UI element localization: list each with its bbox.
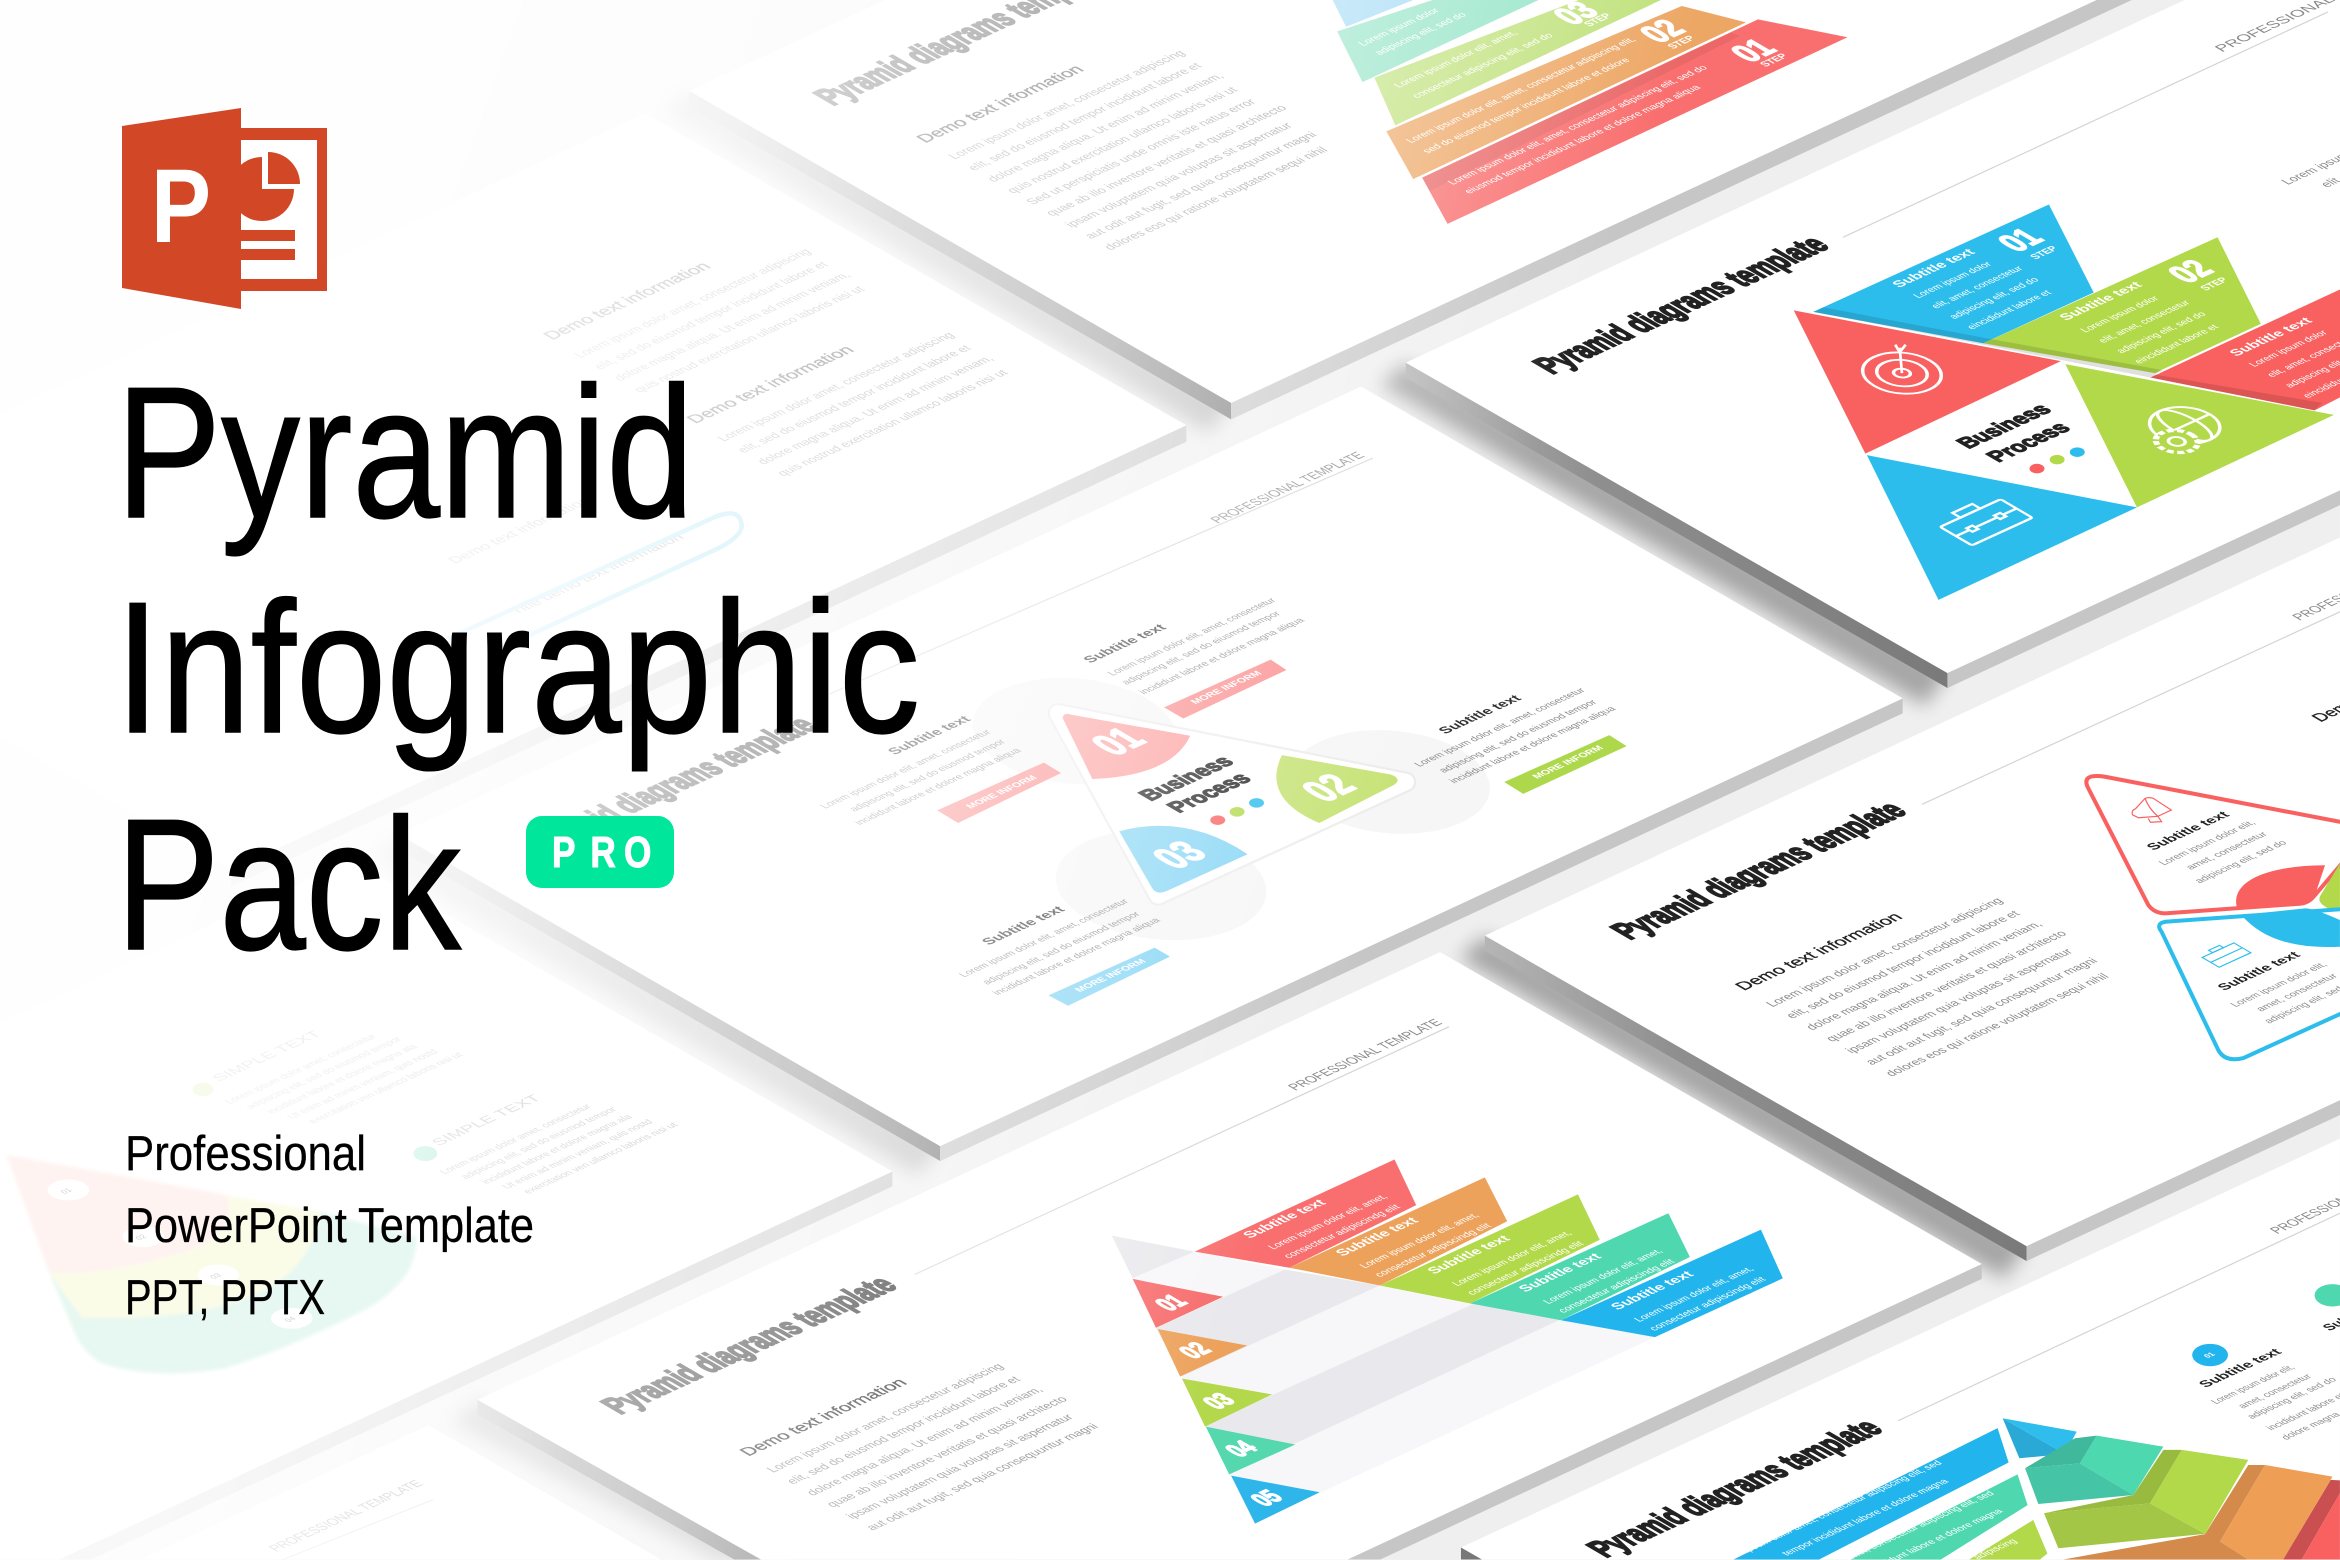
- rounded triangle: 01: [1080, 721, 1156, 762]
- simple text block two: Ut enim ad minim veniam, quis nostd: [500, 1118, 656, 1191]
- colored ribbons: Lorem ipsum dolor elit, amet,: [1266, 1193, 1391, 1251]
- frame: blue: amet, consectetur: [2254, 972, 2340, 1013]
- icon: small briefcase: [2198, 941, 2251, 967]
- heading: Pyramid diagrams template: [1525, 232, 1838, 379]
- numbered text block: 01: [2202, 1351, 2218, 1359]
- frame: red: amet, consectetur: [2184, 830, 2271, 872]
- heading: Pyramid diagrams template: [1603, 797, 1915, 944]
- frame: blue: Lorem ipsum dolor elit,: [2228, 961, 2330, 1009]
- triangle tabs and triangles: 02: [2159, 255, 2222, 288]
- triangle tabs and triangles: eincididunt labore et: [2132, 323, 2222, 366]
- block: subtitle left: Lorem ipsum dolor elit, amet, consectetur: [818, 728, 995, 810]
- stepped pyramid bands: adipiscing elit, sed do: [1373, 11, 1470, 57]
- subtitle text block: [125, 1127, 534, 1325]
- slide: faded top-left text slide: Demo text information: [682, 343, 858, 426]
- simple text block one: Ut enim ad minim veniam, quis nostd: [285, 1048, 441, 1121]
- icon: briefcase: [1932, 495, 2032, 545]
- demo text block: [1731, 894, 2130, 1078]
- demo text block: dolores eos qui ratione voluptatem sequi nihil: [1101, 145, 1331, 252]
- rounded triangle: 02: [1291, 768, 1367, 808]
- professional template label: PROFESSIONAL TEMPLATE: [1206, 449, 1368, 525]
- simple text block one: exercitation ven ullamco laboris nisi ut: [306, 1051, 466, 1126]
- block: subtitle right: adipiscing elit, sed do eiusmod tempor: [1437, 698, 1601, 775]
- simple text block two: SIMPLE TEXT: [427, 1092, 545, 1148]
- colored ribbons: consectetur adipiscindg elit: [1647, 1276, 1769, 1333]
- slide: faded top-left text slide: Title demo text information: [505, 531, 687, 616]
- block: subtitle right: incididunt labore et dolore magna aliqua: [1447, 705, 1619, 785]
- striped triangle: [1112, 1236, 1655, 1523]
- demo text block: dolore magna aliqua. Ut enim ad minim veniam,: [1802, 919, 2045, 1032]
- triangle tabs and triangles: adipiscing elit, sed do: [2114, 310, 2210, 355]
- block: subtitle right: Lorem ipsum dolor elit, amet, consectetur: [1412, 686, 1589, 769]
- triangle tabs and triangles: Lorem ipsum dolor: [2247, 329, 2331, 369]
- subtitle text block: PPT, PPTX: [125, 1271, 325, 1325]
- triangle tabs and triangles: [1794, 204, 2340, 600]
- step bars: ipsum dolor amet, consectetur adipiscing elit, sed: [1741, 1459, 1945, 1554]
- heading: Pyramid diagrams template: [1579, 1415, 1891, 1560]
- block: subtitle bottom: MORE INFORM: [1073, 958, 1149, 994]
- subtitle text block: Professional: [125, 1127, 366, 1181]
- block: subtitle left: MORE INFORM: [964, 774, 1040, 810]
- rounded triangle: 03: [1141, 835, 1218, 875]
- demo text block: Demo text information: [735, 1376, 911, 1459]
- faded pyramid blob: 04: [282, 1315, 299, 1323]
- demo text block: elit, sed do eiusmod tempor incididunt labore et: [1783, 908, 2024, 1020]
- colored ribbons: Subtitle text: [1239, 1197, 1330, 1240]
- simple text block two: exercitation ven ullamco laboris nisi ut: [521, 1121, 681, 1196]
- triangle tabs and triangles: eincididunt labore et: [1965, 289, 2055, 331]
- slide: faded top-left text slide: Lorem ipsum dolor amet, consectetur adipiscing: [714, 330, 958, 443]
- frame: red: [2086, 776, 2340, 917]
- badge: PRO: PRO: [552, 828, 651, 877]
- frame: red: Lorem ipsum dolor elit,: [2157, 819, 2259, 867]
- demo text block: quis nostrud exercitation ullamco laboris nisi ut: [1003, 85, 1241, 195]
- colored ribbons: [1195, 1160, 1783, 1337]
- stepped pyramid bands: sed do eiusmod tempor incididunt labore et dolore: [1420, 56, 1634, 155]
- demo text block: aut odit aut fugit, sed quia consequuntur magni: [1862, 956, 2101, 1067]
- demo text block: Lorem ipsum dolor amet, consectetur adipiscing: [763, 1361, 1007, 1474]
- demo text block: aut odit aut fugit, sed quia consequuntur magni: [863, 1421, 1101, 1532]
- faded pyramid blob: 02: [133, 1233, 149, 1241]
- stepped pyramid bands: eiusmod tempor incididunt labore et dolore magna aliqua: [1462, 84, 1704, 196]
- background circle three: [1012, 807, 1310, 962]
- slide: faded top-left text slide: dolore magna aliqua. Ut enim ad minim veniam,: [611, 270, 854, 383]
- heading: Pyramid diagrams template: [593, 1272, 906, 1419]
- block: subtitle right: MORE INFORM: [1530, 744, 1607, 781]
- demo text block: dolore magna aliqua. Ut enim ad minim veniam,: [984, 71, 1227, 184]
- block: subtitle right: Subtitle text: [1435, 693, 1525, 736]
- numbered tabs: 02: [1172, 1338, 1218, 1362]
- triangle tabs and triangles: Subtitle text: [2226, 315, 2316, 358]
- background circle one: [931, 656, 1218, 806]
- block: subtitle left: adipiscing elit, sed do eiusmod tempor: [847, 738, 1009, 813]
- icon: globe gear: [2125, 400, 2236, 457]
- demo text block: Lorem ipsum dolor amet, consectetur adipiscing: [1763, 896, 2006, 1009]
- demo text block: [912, 46, 1349, 252]
- colored ribbons: Subtitle text: [1515, 1251, 1605, 1294]
- slide: faded top-left text slide: Lorem ipsum dolor amet, consectetur adipiscing: [571, 247, 815, 360]
- demo text block: ipsam voluptatem quia voluptas sit aspernatur: [1062, 121, 1296, 229]
- slide: center rounded triangle: [373, 387, 1903, 1174]
- 3D pyramid: [2003, 1418, 2340, 1559]
- triangle tabs and triangles: STEP: [2028, 245, 2061, 261]
- stepped pyramid bands: STEP: [1665, 34, 1698, 51]
- numbered tabs: 05: [1244, 1486, 1289, 1510]
- subtitle text block: PowerPoint Template: [125, 1199, 534, 1253]
- center label: business process: [1951, 400, 2085, 473]
- simple text block one: Lorem ipsum dolor amet, consectetur: [223, 1033, 380, 1106]
- simple text block two: adipiscing elit, sed do eiusmod tempor: [458, 1106, 620, 1181]
- triangle tabs and triangles: 01: [1989, 223, 2052, 257]
- badge: PRO: [526, 816, 674, 888]
- icon: target: [1846, 344, 1958, 402]
- rounded triangle: Process: [1161, 769, 1257, 816]
- slide: faded top-left text slide: Demo text information: [444, 495, 595, 566]
- stepped pyramid bands: Lorem ipsum dolor elit, amet,: [1392, 29, 1521, 90]
- stepped pyramid bands: STEP: [1581, 12, 1615, 28]
- stepped pyramid bands: consectetur adipiscing elit, sed do: [1410, 32, 1557, 100]
- demo text block: quae ab illo inventore veritatis et quasi architecto: [1822, 928, 2070, 1044]
- stepped pyramid bands: Lorem ipsum dolor: [1356, 7, 1443, 48]
- title: Pyramid: [116, 348, 694, 557]
- numbered tabs: [1133, 1279, 1320, 1524]
- icon: megaphone: [2132, 798, 2171, 822]
- block: subtitle top: Lorem ipsum dolor elit, amet, consectetur: [1105, 597, 1280, 678]
- title: Infographic: [115, 563, 920, 772]
- faded pyramid blob: 03: [208, 1272, 224, 1280]
- block: subtitle top: Subtitle text: [1079, 622, 1170, 665]
- numbered text block: Lorem ipsum dolor elit,: [2209, 1364, 2298, 1406]
- frame: red: adipiscing elit, sed do: [2193, 839, 2290, 885]
- triangle tabs and triangles: STEP: [2198, 276, 2231, 293]
- frame: red: Subtitle text: [2143, 809, 2233, 852]
- triangle tabs and triangles: elit, amet, consectetur: [1929, 265, 2027, 310]
- colored ribbons: Lorem ipsum dolor elit, amet,: [1450, 1230, 1575, 1288]
- block: subtitle bottom: incididunt labore et dolore magna aliqua: [991, 916, 1164, 997]
- triangle tabs and triangles: adipiscing elit, sed do: [1947, 276, 2042, 321]
- slide: bottom five tier pyramid: [452, 952, 1982, 1559]
- demo text block: aut odit aut fugit, sed quia consequuntur magni: [1081, 130, 1320, 241]
- simple text block two: Lorem ipsum dolor amet, consectetur: [438, 1103, 595, 1176]
- title: Pack: [116, 780, 461, 989]
- simple text block one: incididunt labore et dolore magna ala: [264, 1043, 421, 1116]
- block: subtitle bottom: Subtitle text: [978, 904, 1069, 947]
- numbered text block: Subtitle text: [2195, 1346, 2286, 1389]
- demo text block: elit, sed do eiusmod tempor incididunt labore et: [964, 61, 1205, 173]
- icon: PowerPoint logo: [122, 108, 327, 309]
- slide: top-right triangles: [1380, 0, 2340, 706]
- block: subtitle left: Subtitle text: [884, 714, 975, 757]
- center label: business process: Process: [1980, 419, 2076, 465]
- slide: faded top-left text slide: dolore magna aliqua. Ut enim ad minim veniam,: [754, 354, 997, 466]
- rounded triangle: Business: [1133, 752, 1239, 804]
- stepped pyramid bands: Lorem ipsum dolor elit, amet, consectetur adipiscing elit, sed do: [1446, 64, 1711, 187]
- demo text block: dolore magna aliqua. Ut enim ad minim veniam,: [803, 1385, 1046, 1498]
- step bars: [1734, 1428, 2047, 1560]
- icon: arrow: [1895, 345, 1906, 373]
- icon: PowerPoint logo: P: [151, 148, 211, 265]
- triangle tabs and triangles: Lorem ipsum dolor: [2078, 295, 2163, 334]
- stepped pyramid bands: 01: [1722, 34, 1785, 67]
- triangle tabs and triangles: Lorem ipsum dolor: [1911, 260, 1995, 300]
- colored ribbons: consectetur adipiscindg elit: [1465, 1240, 1587, 1297]
- block: subtitle right: [1412, 686, 1627, 794]
- block: subtitle top: adipiscing elit, sed do eiusmod tempor: [1119, 610, 1284, 687]
- block: subtitle left: [818, 714, 1061, 827]
- step bars: tempor incididunt labore et dolore magna: [1780, 1478, 1952, 1558]
- rounded triangle: [1058, 713, 1406, 895]
- slide: faded bottom-left: [140, 1425, 661, 1559]
- demo text block: Lorem ipsum dolor amet, consectetur adipiscing: [945, 48, 1189, 161]
- triangle tabs and triangles: elit, amet, consectetur: [2096, 299, 2194, 345]
- block: subtitle bottom: adipiscing elit, sed do eiusmod tempor: [980, 910, 1144, 986]
- colored ribbons: Lorem ipsum dolor elit, amet,: [1541, 1248, 1666, 1306]
- demo text block: Sed ut perspiciatis unde omnis iste natus error: [1023, 97, 1259, 207]
- slide: faded simple text slide: [0, 860, 892, 1559]
- demo text block: elit, sed do eiusmod tempor incididunt labore et: [783, 1374, 1024, 1486]
- simple text block one: adipiscing elit, sed do eiusmod tempor: [244, 1035, 405, 1111]
- block: subtitle top: MORE INFORM: [1188, 670, 1265, 706]
- simple text block one: [193, 1019, 466, 1138]
- background circle two: [1251, 709, 1531, 855]
- numbered text block: amet, consectetur: [2236, 1373, 2316, 1410]
- block: subtitle top: [1079, 597, 1308, 719]
- faded pyramid blob: [7, 1155, 416, 1373]
- slide: faded top-left text slide: elit, sed do eiusmod tempor incididunt labore et: [734, 343, 975, 455]
- title: [115, 348, 920, 989]
- simple text block two: [413, 1089, 681, 1208]
- slide: faded top-left text slide: elit, sed do eiusmod tempor incididunt labore et: [591, 259, 832, 371]
- slide: right demo text with frames: [1459, 491, 2340, 1279]
- slide: bottom-right 3D pyramid: [1461, 1139, 2340, 1560]
- stepped pyramid bands: 02: [1631, 14, 1694, 48]
- colored ribbons: Subtitle text: [1423, 1233, 1514, 1276]
- colored ribbons: Subtitle text: [1607, 1269, 1697, 1312]
- demo text block: dolores eos qui ratione voluptatem sequi nihil: [1882, 971, 2112, 1078]
- slide: top stepped pyramid: [664, 0, 2186, 433]
- second numbered marker: [2315, 1284, 2340, 1333]
- triangle tabs and triangles: Subtitle text: [1888, 246, 1979, 290]
- triangle tabs and triangles: Subtitle text: [2055, 279, 2146, 322]
- slide: faded bottom-left: PROFESSIONAL TEMPLATE: [265, 1478, 426, 1554]
- stepped pyramid bands: STEP: [1757, 52, 1791, 69]
- center label: business process: Business: [1951, 400, 2057, 452]
- stepped pyramid bands: [1333, 0, 1847, 224]
- demo text block: quae ab illo inventore veritatis et quasi architecto: [1042, 103, 1290, 218]
- stepped pyramid bands: Lorem ipsum dolor elit, amet, consectetur adipiscing elit,: [1404, 36, 1639, 145]
- colored ribbons: consectetur adipiscindg elit: [1556, 1258, 1678, 1315]
- demo text block: [735, 1359, 1111, 1532]
- simple text block one: SIMPLE TEXT: [208, 1028, 326, 1083]
- demo text block: quae ab illo inventore veritatis et quasi architecto: [823, 1394, 1071, 1509]
- numbered tabs: 04: [1218, 1437, 1264, 1461]
- colored ribbons: consectetur adipiscindg elit: [1373, 1222, 1494, 1279]
- numbered text block: adipiscing elit, sed do: [2245, 1376, 2340, 1421]
- demo text block: ipsam voluptatem quia voluptas sit aspernatur: [1842, 947, 2076, 1055]
- numbered tabs: 01: [1148, 1291, 1194, 1315]
- frame: blue: [2159, 906, 2340, 1059]
- demo text block: Demo text information: [912, 62, 1088, 145]
- colored ribbons: Lorem ipsum dolor elit, amet,: [1632, 1265, 1757, 1324]
- numbered tabs: 03: [1196, 1389, 1241, 1413]
- numbered text block: [2192, 1344, 2340, 1442]
- slide: faded top-left text slide: quis nostrud exercitation ullamco laboris nisi ut: [774, 367, 1012, 478]
- block: subtitle bottom: Lorem ipsum dolor elit, amet, consectetur: [957, 898, 1132, 979]
- simple text block two: incididunt labore et dolore magna ala: [479, 1113, 636, 1186]
- professional template label: PROFESSIONAL TEMPLATE: [1284, 1017, 1446, 1092]
- heading: Pyramid diagrams template: [514, 712, 826, 859]
- block: subtitle bottom: [957, 898, 1170, 1006]
- frame: blue: Subtitle text: [2214, 949, 2304, 992]
- slide: faded top-left text slide: quis nostrud exercitation ullamco laboris nisi ut: [630, 284, 868, 394]
- block: subtitle left: incididunt labore et dolore magna aliqua: [852, 747, 1025, 827]
- colored ribbons: consectetur adipiscindg elit: [1282, 1203, 1403, 1260]
- demo text block: ipsam voluptatem quia voluptas sit aspernatur: [843, 1412, 1077, 1521]
- faded pyramid blob: 01: [59, 1187, 74, 1195]
- slide: faded top-left text slide: Demo text information: [539, 259, 715, 342]
- colored ribbons: Subtitle text: [1332, 1215, 1422, 1258]
- slide: faded top-left text slide: [0, 113, 1186, 886]
- colored ribbons: Lorem ipsum dolor elit, amet,: [1358, 1212, 1482, 1270]
- block: subtitle top: incididunt labore et dolore magna aliqua: [1137, 617, 1308, 696]
- demo text block: Demo text information: [1731, 910, 1907, 993]
